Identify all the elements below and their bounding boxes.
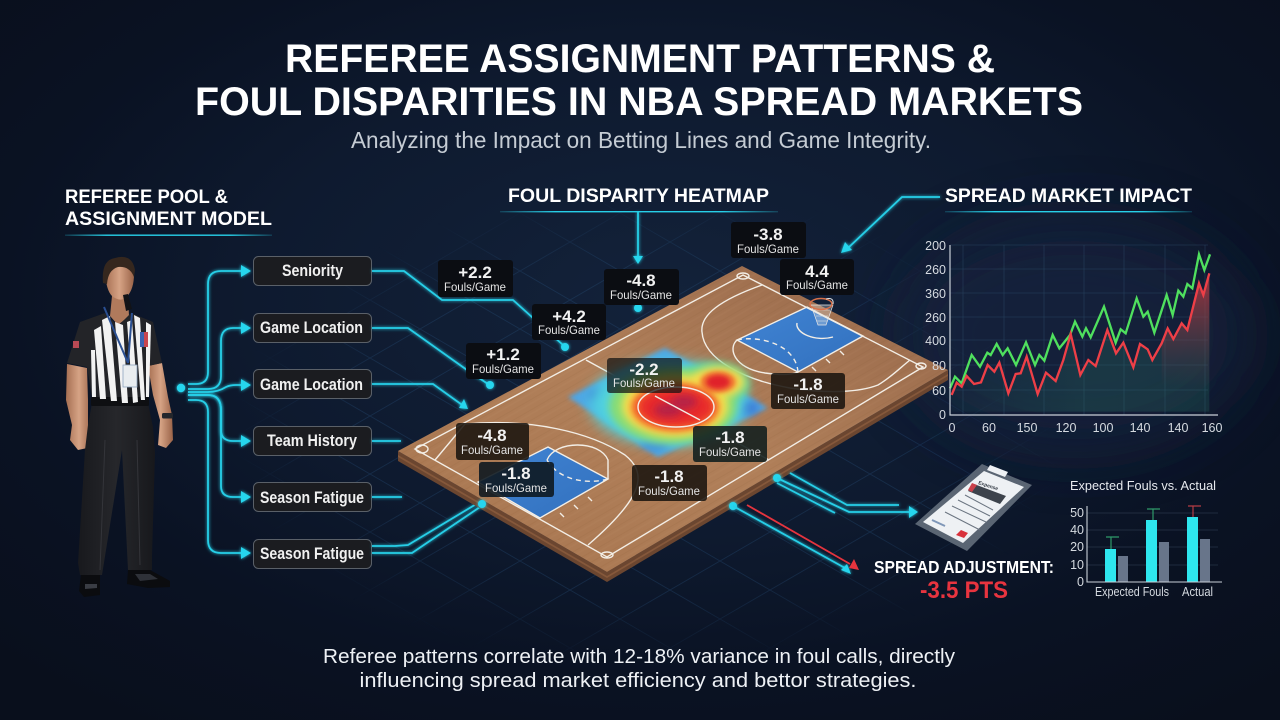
bar chart: expected vs actual: Expected Fouls (1095, 585, 1169, 599)
bar chart: expected vs actual: 20 (1070, 540, 1084, 554)
factor box: seniority: Seniority (282, 262, 344, 280)
arrow: spread heading to court (841, 197, 940, 253)
foul label: -4.8 top: Fouls/Game (610, 288, 672, 302)
trousers (78, 403, 155, 575)
factor box: season fatigue 2 (254, 540, 372, 568)
factor box: team history (254, 426, 372, 456)
hair (103, 257, 135, 284)
paint areas (478, 447, 608, 518)
foul label: -1.8 right: -1.8 (793, 375, 823, 394)
bar chart: expected vs actual: 40 (1070, 523, 1084, 537)
foul label: -1.8 paint (479, 462, 554, 497)
line chart: spread market: 60 (982, 421, 996, 435)
spread adjustment callout: -3.5 PTS (920, 577, 1008, 604)
subtitle: Analyzing the Impact on Betting Lines and Game Integrity. (351, 127, 931, 153)
line chart: spread market: 120 (1056, 421, 1076, 435)
footer takeaway (323, 646, 955, 692)
icon: hoop (810, 298, 833, 325)
line chart: spread market: 0 (939, 408, 946, 422)
factor box: season fatigue 2: Season Fatigue (260, 545, 364, 563)
foul label: -3.8: -3.8 (753, 225, 783, 244)
spread adjustment callout: SPREAD ADJUSTMENT: (874, 557, 1054, 577)
right arm (148, 363, 173, 448)
factor box: season fatigue: Season Fatigue (260, 489, 364, 507)
line chart: spread market: 160 (1202, 421, 1222, 435)
foul label: -4.8 lower (456, 423, 529, 460)
jersey stripes (91, 315, 151, 403)
line chart: spread market: 80 (932, 359, 946, 373)
neck (110, 296, 129, 325)
court lines (415, 275, 923, 557)
line chart: spread market: 260 (925, 311, 946, 325)
shoes (79, 575, 100, 597)
foul label: +1.2: +1.2 (486, 345, 520, 364)
icon: betting slip (915, 464, 1032, 551)
foul label: -1.8 right (771, 373, 845, 409)
line chart: spread market: 60 (932, 384, 946, 398)
line chart: spread market: 0 (949, 421, 956, 435)
bar chart: expected vs actual (1070, 478, 1222, 599)
bar chart: expected vs actual: Expected Fouls vs. Actual (1070, 478, 1216, 493)
heading: referee pool: ASSIGNMENT MODEL (65, 209, 272, 230)
foul label: -4.8 top: -4.8 (626, 271, 656, 290)
spread adjustment callout (874, 557, 1054, 604)
title: FOUL DISPARITIES IN NBA SPREAD MARKETS (195, 80, 1083, 124)
line chart: spread market (925, 239, 1222, 435)
icon: betting slip: Expense (977, 480, 999, 492)
line chart: spread market: 150 (1017, 421, 1037, 435)
bar chart: expected vs actual: Actual (1182, 585, 1213, 599)
left arm (66, 364, 92, 450)
foul label: 4.4 (780, 259, 854, 295)
foul label: -4.8 top (604, 269, 679, 305)
foul label: -3.8: Fouls/Game (737, 242, 799, 256)
foul label: 4.4: 4.4 (805, 262, 829, 281)
bar chart: expected vs actual: 0 (1077, 575, 1084, 589)
factor box: game location: Game Location (260, 319, 363, 337)
foul label: +4.2: +4.2 (552, 307, 586, 326)
foul label: +4.2 (532, 304, 606, 340)
head (105, 259, 134, 300)
title (195, 37, 1083, 124)
line chart: spread market: 200 (925, 239, 946, 253)
factor box: season fatigue (254, 482, 372, 512)
foul label: +2.2: Fouls/Game (444, 280, 506, 294)
foul label: -1.8 center: Fouls/Game (699, 445, 761, 459)
foul label: -1.8 bottom (632, 465, 707, 501)
arrow: heatmap heading to court (633, 212, 643, 264)
line chart: spread market: 100 (1093, 421, 1113, 435)
heading: spread market impact: SPREAD MARKET IMPACT (945, 186, 1192, 207)
footer takeaway: influencing spread market efficiency and bettor strategies. (360, 670, 916, 692)
court dots (478, 304, 781, 510)
whistle (123, 294, 132, 311)
foul label: -4.8 lower: Fouls/Game (461, 443, 523, 457)
bar chart: expected vs actual: 10 (1070, 558, 1084, 572)
foul label: +4.2: Fouls/Game (538, 323, 600, 337)
line chart: spread market: 260 (925, 263, 946, 277)
factor box: game location 2: Game Location (260, 376, 363, 394)
foul label: +2.2: +2.2 (458, 263, 492, 282)
jersey (67, 313, 162, 397)
line chart: spread market: 140 (1168, 421, 1188, 435)
connectors out of court (733, 473, 918, 574)
foul label: -2.2: Fouls/Game (613, 376, 675, 390)
heatmap (568, 348, 768, 457)
footer takeaway: Referee patterns correlate with 12-18% variance in foul calls, directly (323, 646, 955, 668)
foul label: -2.2 (607, 358, 682, 393)
heading: heatmap: FOUL DISPARITY HEATMAP (508, 186, 769, 207)
foul label: -3.8 (731, 222, 806, 258)
heading: referee pool (65, 187, 272, 236)
factor box: game location 2 (254, 370, 372, 398)
foul label: -1.8 center: -1.8 (715, 428, 745, 447)
foul label: -1.8 right: Fouls/Game (777, 392, 839, 406)
line chart: spread market: 400 (925, 334, 946, 348)
foul label: -1.8 bottom: Fouls/Game (638, 484, 700, 498)
line chart: spread market: 140 (1130, 421, 1150, 435)
foul label: -1.8 paint: -1.8 (501, 464, 531, 483)
title: REFEREE ASSIGNMENT PATTERNS & (285, 37, 995, 81)
foul label: -2.2: -2.2 (629, 360, 659, 379)
foul label: -4.8 lower: -4.8 (477, 426, 507, 445)
basketball court (398, 266, 948, 582)
factor box: game location (254, 314, 372, 342)
foul label: -1.8 center (693, 426, 767, 462)
foul label: -1.8 paint: Fouls/Game (485, 481, 547, 495)
connector tree from referee (177, 265, 251, 559)
factor box: team history: Team History (267, 432, 358, 450)
foul label: +2.2 (438, 260, 513, 297)
foul label: -1.8 bottom: -1.8 (654, 467, 684, 486)
foul label: 4.4: Fouls/Game (786, 278, 848, 292)
icon: referee figure (66, 257, 173, 597)
foul label: +1.2 (466, 343, 541, 379)
heading: referee pool: REFEREE POOL & (65, 187, 228, 208)
line chart: spread market: 360 (925, 287, 946, 301)
factor box: seniority (254, 256, 372, 286)
foul label: +1.2: Fouls/Game (472, 362, 534, 376)
bar chart: expected vs actual: 50 (1070, 506, 1084, 520)
connectors into court (372, 271, 563, 553)
